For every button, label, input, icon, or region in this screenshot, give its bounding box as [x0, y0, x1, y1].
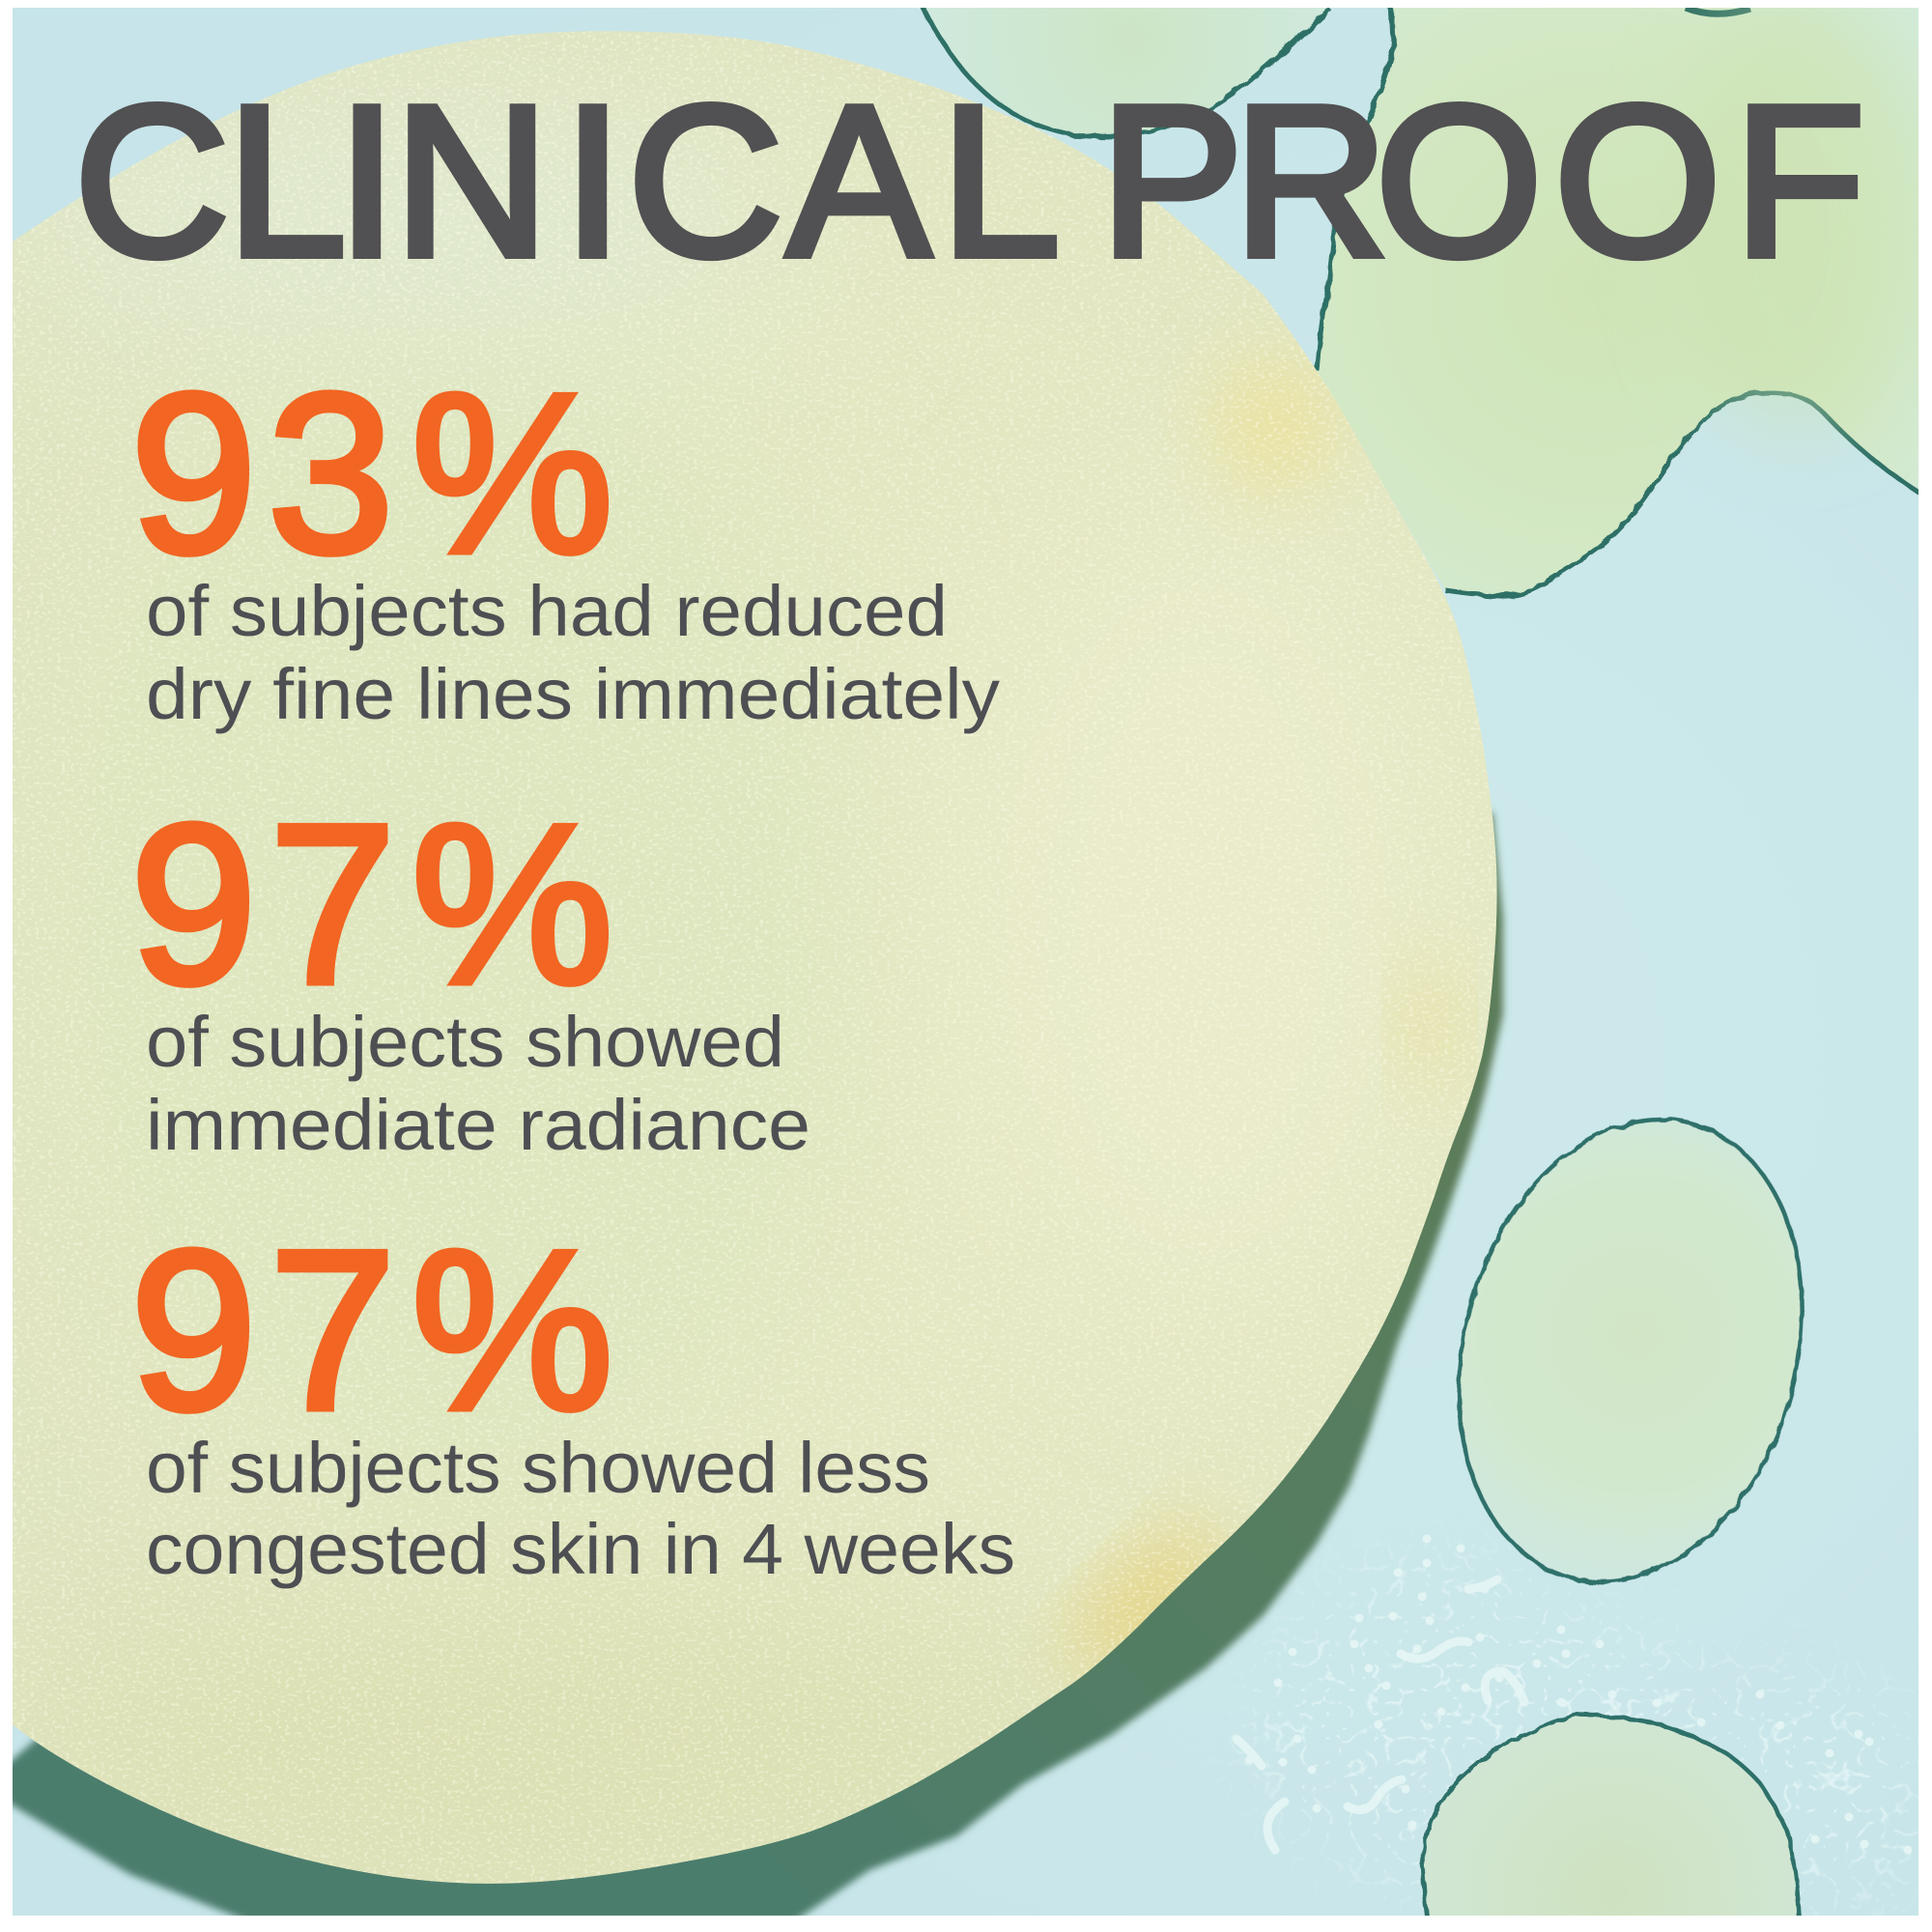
stat 2 description [146, 1002, 810, 1165]
pad tone: top pale [0, 97, 811, 348]
stat 1 description [146, 571, 1000, 734]
pad tone: lower darker [0, 1584, 1082, 1893]
yellow stain: upper right [1217, 357, 1333, 493]
stat 3 [130, 1203, 1015, 1589]
stat 2 description: of subjects showed [146, 1002, 784, 1082]
stat 1 description: of subjects had reduced [146, 571, 948, 651]
stat 1 [130, 346, 1000, 734]
stat 1 description: dry fine lines immediately [146, 654, 1000, 734]
yellow stain: lower right [1054, 1508, 1245, 1699]
bubble texture [1231, 1544, 1918, 1909]
green droplet: lower [1423, 1715, 1800, 1922]
green droplet: top small [923, 0, 1330, 137]
stat 3 description: of subjects showed less [146, 1428, 930, 1508]
title: CLINICAL PROOF [74, 62, 1865, 301]
stat 2 description: immediate radiance [146, 1085, 810, 1165]
stat 3 description [146, 1428, 1015, 1589]
yellow stain: right [1406, 956, 1454, 1092]
pad tone: green left side [58, 319, 869, 1517]
pad tone: bright right side [976, 512, 1439, 1323]
water bubbles [1236, 1539, 1908, 1850]
fibre texture [0, 0, 1546, 1932]
stat 3 number: 97% [130, 1203, 613, 1457]
cotton pad [0, 0, 1546, 1932]
pad shadow [0, 811, 1503, 1922]
stat 3 description: congested skin in 4 weeks [146, 1509, 1015, 1589]
stat 2 number: 97% [130, 777, 613, 1031]
green droplet: oval [1456, 1117, 1804, 1586]
stat 1 number: 93% [130, 346, 613, 600]
green droplet: upper right large [1317, 0, 1932, 596]
stat 2 [130, 777, 810, 1165]
